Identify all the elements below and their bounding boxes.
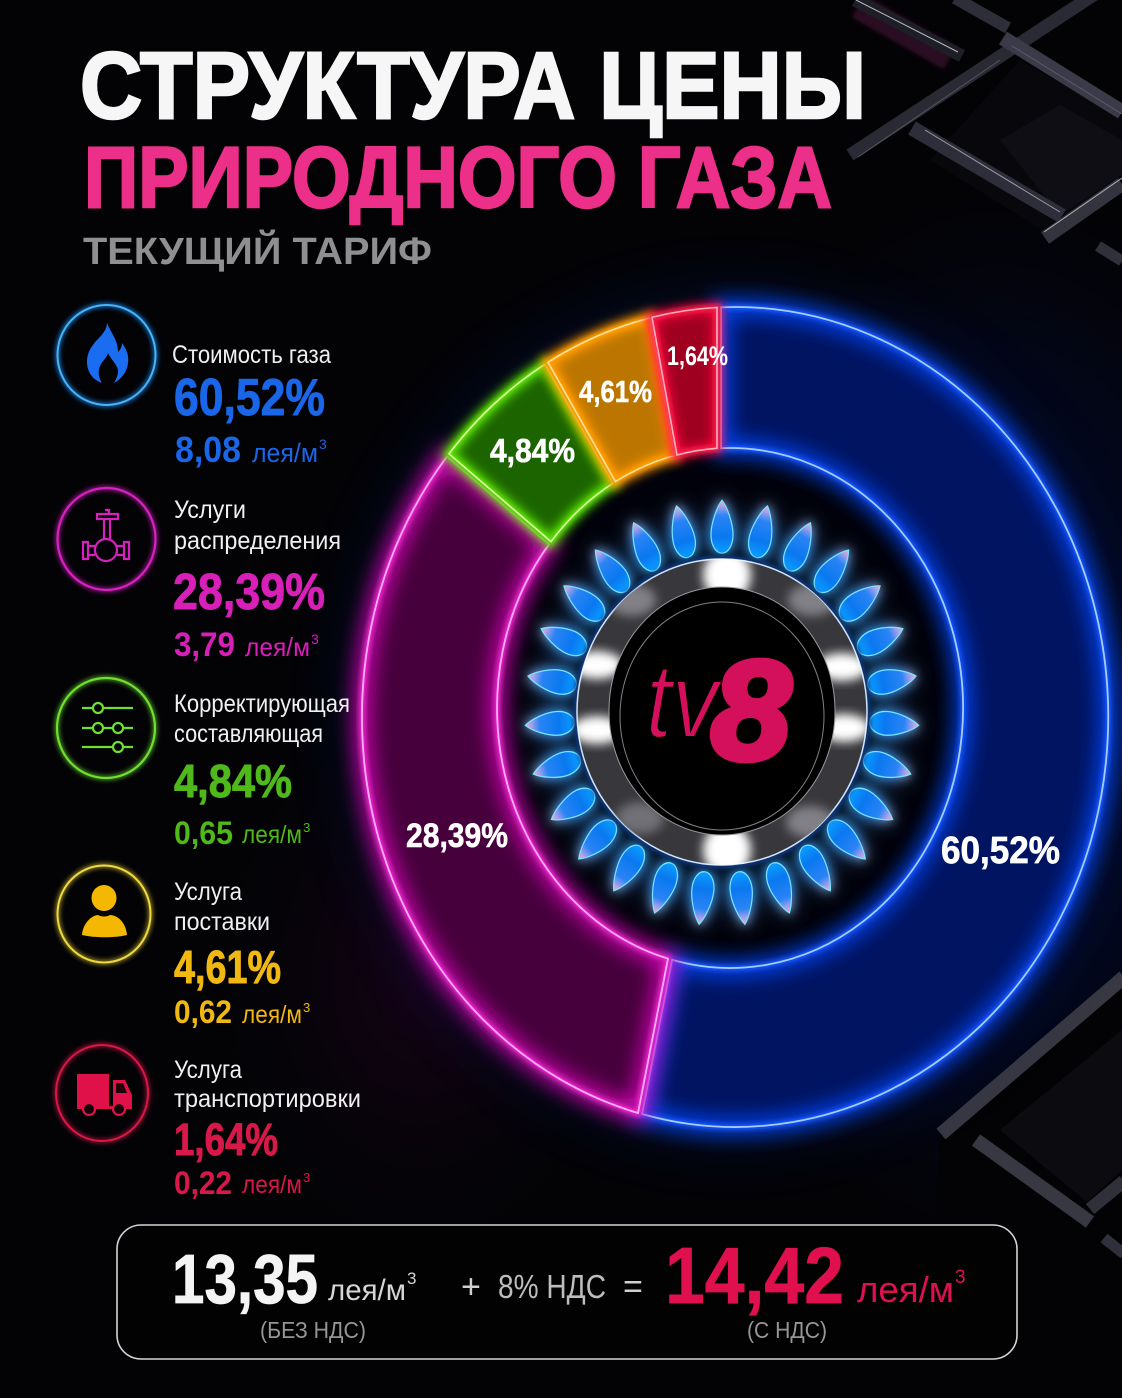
price without VAT: 3 <box>407 1269 416 1288</box>
price: лея/м <box>242 1171 302 1199</box>
icon: person <box>58 866 150 962</box>
price <box>174 994 310 1030</box>
icon: truck <box>56 1045 148 1141</box>
legend item: gas cost <box>58 305 331 470</box>
label 28,39: 28,39% <box>406 817 508 855</box>
price: 3 <box>319 436 327 452</box>
price without VAT: лея/м <box>328 1274 406 1307</box>
label line 2: распределения <box>174 527 341 555</box>
logo digit 8: 8 <box>711 631 792 789</box>
label: Услуги <box>174 496 246 524</box>
price <box>175 429 327 470</box>
icon: sliders <box>57 678 155 778</box>
segment: red 1.64 <box>652 308 717 455</box>
price with VAT: 3 <box>955 1267 966 1288</box>
label 1,64: 1,64% <box>667 341 728 371</box>
percent: 4,61% <box>174 941 281 993</box>
price: 3 <box>311 631 319 647</box>
price <box>174 815 310 851</box>
burner metal ring <box>571 549 871 876</box>
title <box>80 33 866 273</box>
label: Услуга <box>174 878 242 906</box>
price: 0,22 <box>174 1165 232 1201</box>
price <box>174 626 319 664</box>
label 4,61: 4,61% <box>579 374 652 409</box>
price: 3 <box>303 1000 310 1015</box>
icon: valve <box>58 488 156 590</box>
price: 3 <box>303 1170 310 1185</box>
legend item: supply <box>58 866 310 1030</box>
label: Услуга <box>174 1056 242 1084</box>
legend item: correction <box>57 678 350 851</box>
label: Стоимость газа <box>172 341 331 369</box>
price: лея/м <box>242 1001 302 1029</box>
percent: 1,64% <box>174 1114 278 1165</box>
label line 2: поставки <box>174 908 270 936</box>
legend item: distribution <box>58 488 341 664</box>
price <box>174 1165 310 1201</box>
percent: 28,39% <box>173 563 325 620</box>
price: 0,62 <box>174 994 232 1030</box>
gas burner flames <box>525 500 919 926</box>
tv8 logo <box>646 631 792 789</box>
icon: flame <box>58 305 156 405</box>
percent: 4,84% <box>174 755 292 807</box>
legend item: transport <box>56 1045 361 1201</box>
segment: magenta 28.39 <box>362 456 668 1113</box>
total price panel <box>117 1225 1017 1359</box>
label 60,52: 60,52% <box>941 830 1060 872</box>
subtitle: ТЕКУЩИЙ ТАРИФ <box>83 228 432 273</box>
title line 2: ПРИРОДНОГО ГАЗА <box>84 130 832 226</box>
stove grate bottom right <box>935 977 1122 1398</box>
price: 8,08 <box>175 429 241 470</box>
title: СТРУКТУРА ЦЕНЫ <box>80 33 866 139</box>
percent: 60,52% <box>174 369 325 427</box>
price with VAT: 14,42 <box>665 1231 844 1320</box>
price: лея/м <box>242 821 302 849</box>
plus VAT: + <box>461 1268 481 1306</box>
price: лея/м <box>252 438 318 468</box>
label 4,84: 4,84% <box>490 432 575 469</box>
segment: orange 4.61 <box>548 318 675 482</box>
label: Корректирующая <box>174 690 350 718</box>
label line 2: составляющая <box>174 720 323 748</box>
price: лея/м <box>245 632 310 662</box>
note without VAT: (БЕЗ НДС) <box>260 1317 366 1343</box>
label line 2: транспортировки <box>174 1085 361 1113</box>
price with VAT: лея/м <box>857 1269 954 1310</box>
segment: green 4.84 <box>449 364 613 542</box>
price without VAT: 13,35 <box>172 1240 318 1318</box>
price: 3 <box>303 820 310 835</box>
equals: = <box>623 1268 643 1306</box>
segment: blue 60.52 <box>642 307 1108 1127</box>
note with VAT: (С НДС) <box>747 1317 827 1343</box>
tv8 logo: tv <box>646 642 723 760</box>
price: 3,79 <box>174 626 235 664</box>
stove grate top right <box>850 0 1122 261</box>
price: 0,65 <box>174 815 233 851</box>
donut chart <box>362 307 1108 1127</box>
price with VAT <box>665 1231 966 1320</box>
VAT label: 8% НДС <box>498 1268 606 1305</box>
